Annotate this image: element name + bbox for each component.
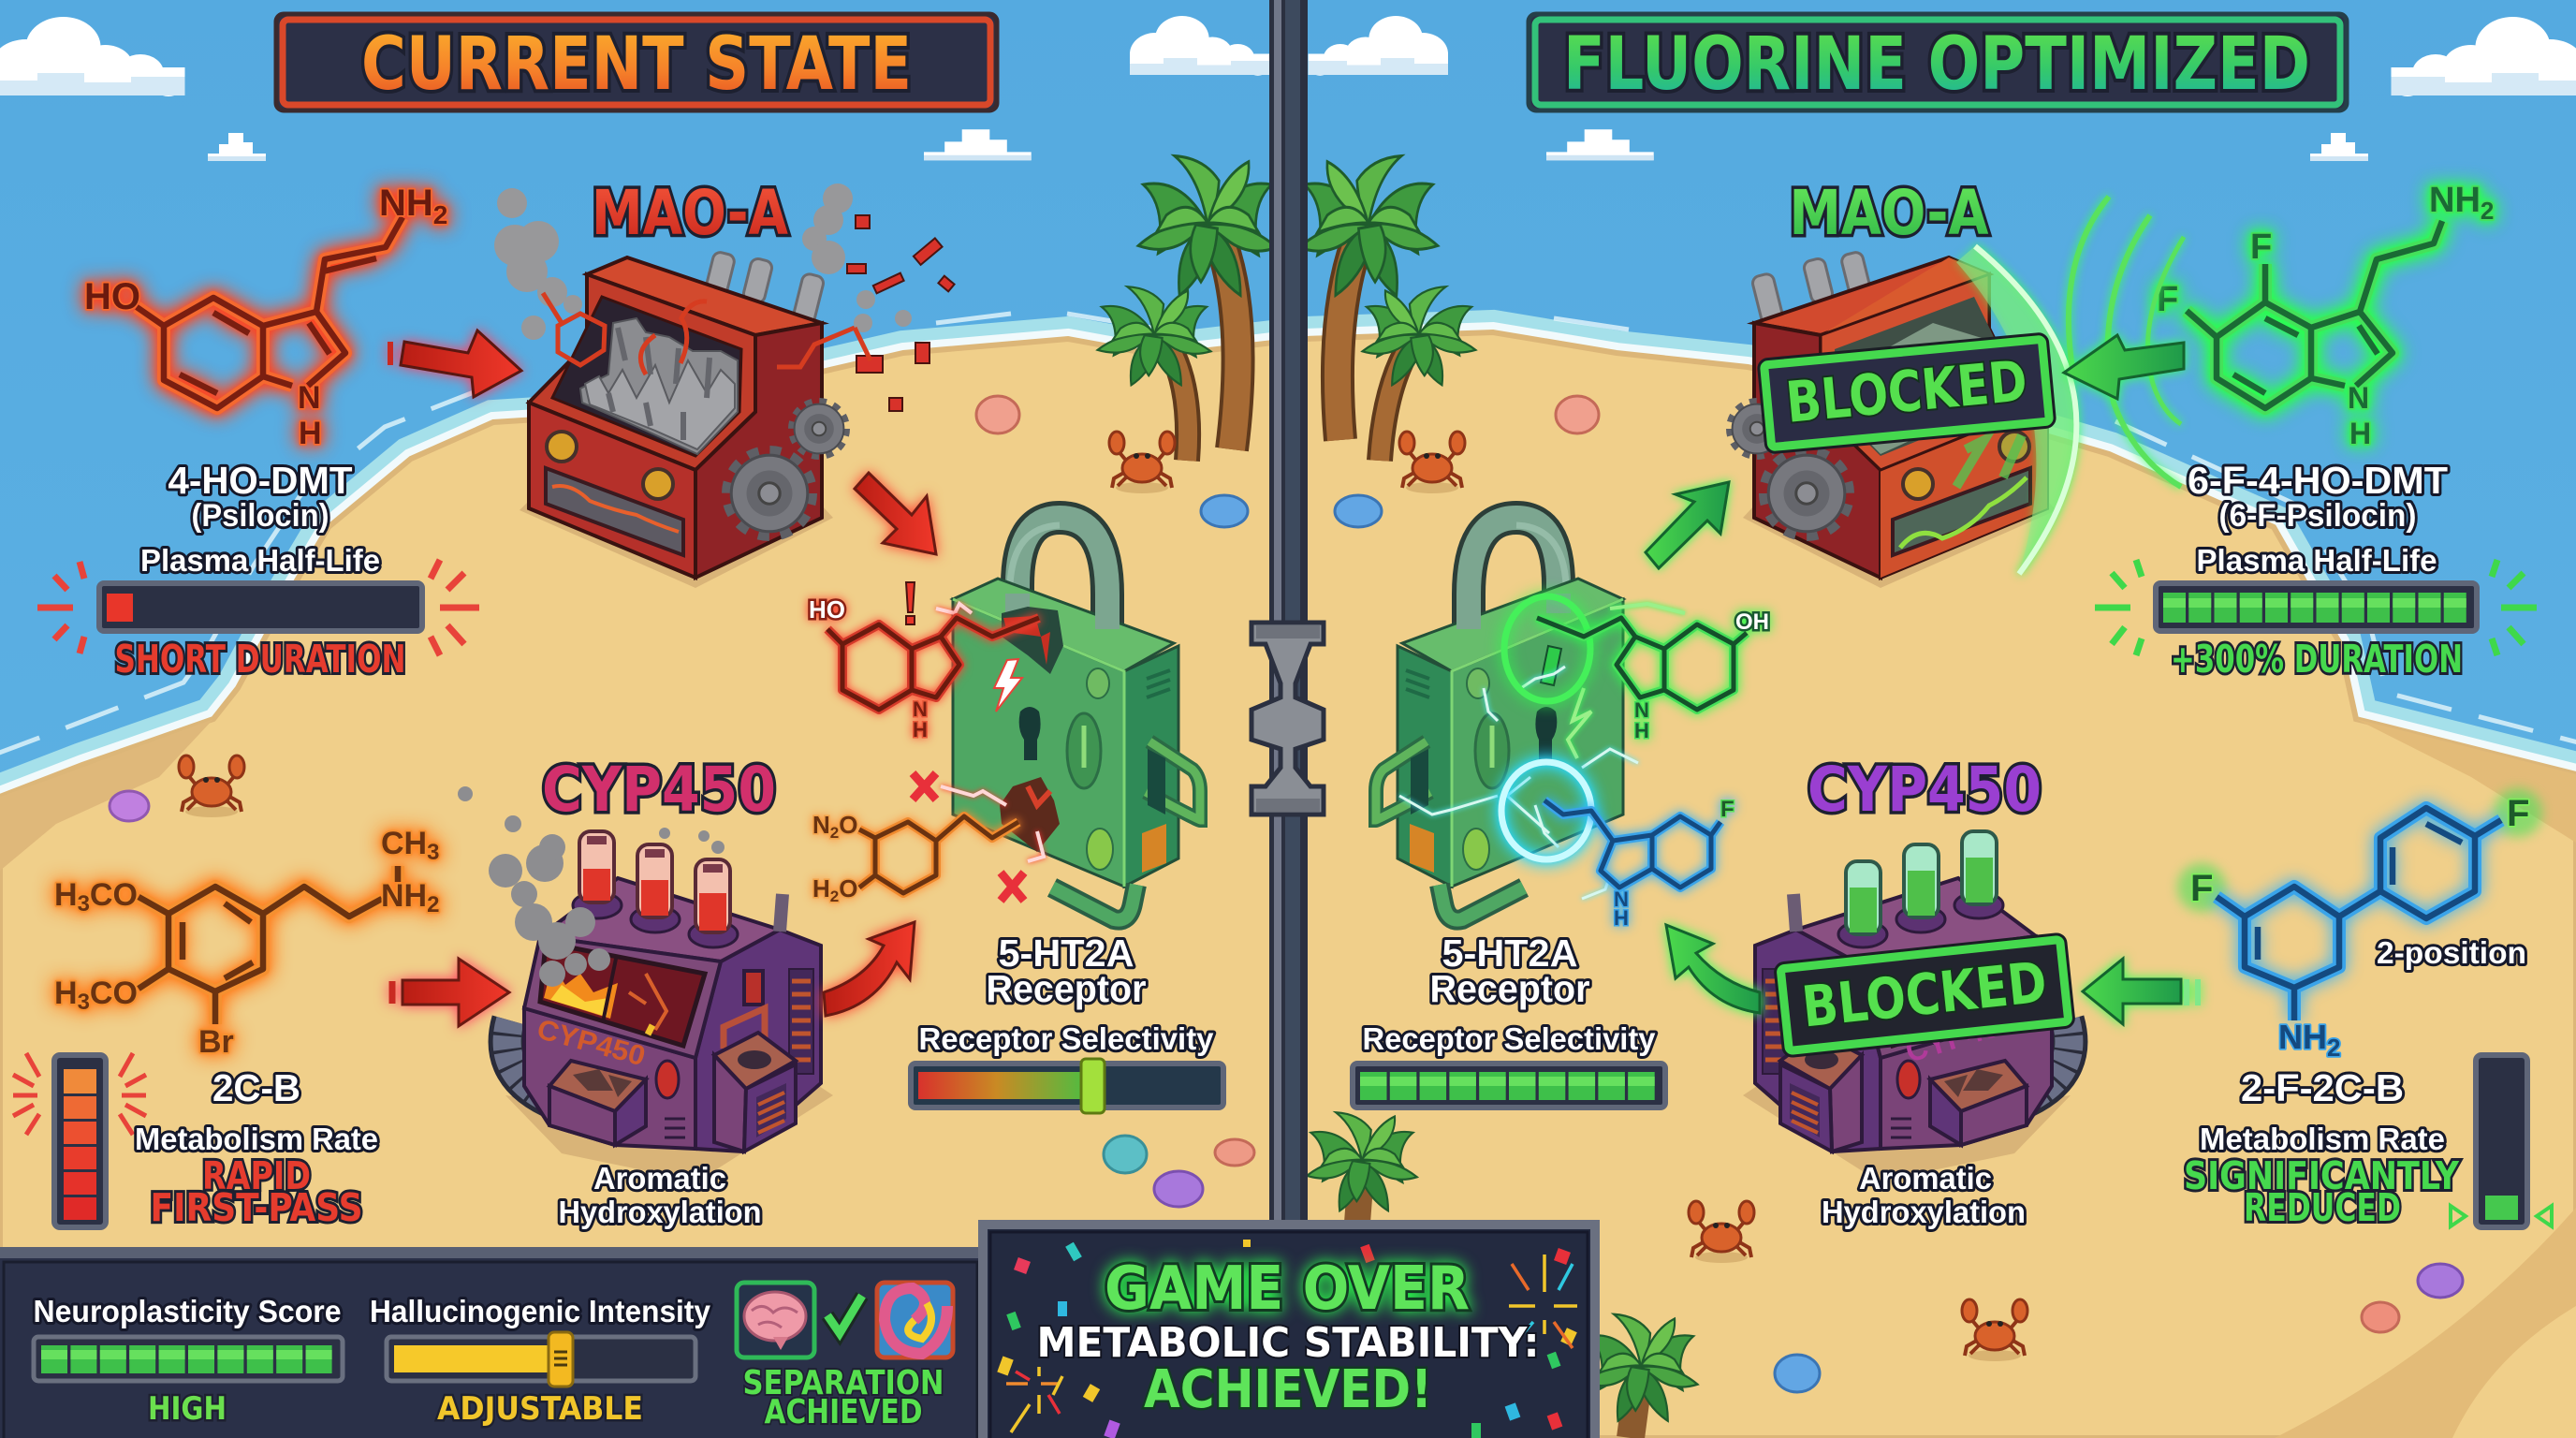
molecule: failed orange ligand: N xyxy=(812,811,830,839)
metric: neuroplasticity score: Neuroplasticity Score xyxy=(34,1294,341,1328)
molecule: 2C-B: 3 xyxy=(78,891,90,917)
arrow: molecule blocked from MAO-A xyxy=(2064,335,2184,399)
molecule: 2C-B: H xyxy=(54,877,78,913)
molecule: bound blue ligand: F xyxy=(1720,797,1734,822)
label: 5-HT2A receptor, left: 5-HT2A xyxy=(998,932,1134,975)
binding ring, green xyxy=(1504,596,1590,701)
icon: psychedelic spiral xyxy=(877,1283,953,1357)
molecule: 2C-B: CO xyxy=(90,877,138,913)
molecule: 2-F-2C-B: F xyxy=(2507,793,2529,834)
machine: CYP450 protected xyxy=(1743,831,2071,1181)
icon: brain xyxy=(737,1283,814,1357)
background: beach xyxy=(0,314,2576,1438)
molecule: 4-HO-DMT: NH xyxy=(379,183,433,224)
molecule: failed orange ligand: O xyxy=(839,811,857,839)
label: metabolism rate, left: RAPID xyxy=(202,1153,311,1198)
panel: game over xyxy=(983,1225,1595,1438)
label: 5-HT2A receptor, right: Receptor xyxy=(1430,967,1590,1010)
molecule: 4-HO-DMT: HO xyxy=(84,276,140,317)
label: 2-position: 2-position xyxy=(2377,935,2526,970)
molecule: failed orange ligand xyxy=(812,811,1018,905)
arrow: MAO-A to receptor xyxy=(855,473,936,554)
receptor lock, left xyxy=(936,518,1200,920)
arrow: CYP450 towards receptor xyxy=(1666,925,1760,1013)
molecule: failed orange ligand: O xyxy=(839,874,857,902)
molecule: 6-F-4-HO-DMT: NH xyxy=(2429,181,2481,220)
gauge: plasma half-life, long: +300% DURATION xyxy=(2171,637,2463,682)
molecule: 2C-B: NH xyxy=(381,878,427,914)
sign: blocked on MAO-A: BLOCKED xyxy=(1783,348,2030,436)
gauge: plasma half-life, short: Plasma Half-Life xyxy=(140,543,380,578)
molecule: 2-F-2C-B: 2 xyxy=(2327,1034,2340,1062)
arrow: CYP450 to receptor xyxy=(824,922,915,1016)
fireworks xyxy=(1006,1255,1577,1432)
label: metabolism rate, left: Metabolism Rate xyxy=(135,1122,378,1156)
label: 4-HO-DMT (Psilocin): (Psilocin) xyxy=(191,498,329,534)
arrow: receptor towards MAO-A xyxy=(1646,482,1729,568)
molecule: 2C-B: 3 xyxy=(427,840,439,865)
icon: red x marks xyxy=(913,773,1024,901)
molecule: 4-HO-DMT: H xyxy=(299,416,322,451)
arrow: 2C-B into CYP450 xyxy=(392,959,509,1026)
molecule: 6-F-4-HO-DMT xyxy=(2157,181,2494,450)
label: aromatic hydroxylation, left: Aromatic xyxy=(593,1161,726,1196)
crabs xyxy=(179,432,2027,1361)
gauge: plasma half-life, short: SHORT DURATION xyxy=(114,637,406,682)
metric: hallucinogenic intensity: ADJUSTABLE xyxy=(437,1390,643,1428)
label: 6-F-4-HO-DMT (6-F-Psilocin): (6-F-Psilocin) xyxy=(2218,498,2417,534)
machine: CYP450 protected: CYP450 xyxy=(1901,1003,2019,1070)
title banner: fluorine optimized: FLUORINE OPTIMIZED xyxy=(1563,22,2310,107)
label: 5-HT2A receptor, right: 5-HT2A xyxy=(1442,932,1578,975)
label: metabolism rate, right xyxy=(2184,1122,2460,1230)
molecule: bound blue ligand: H xyxy=(1614,906,1629,930)
heading: MAO-A damaged: MAO-A xyxy=(592,177,788,249)
molecule: 2-F-2C-B: F xyxy=(2190,868,2213,909)
shield arcs xyxy=(1956,197,2184,574)
gauge: metabolism rate, right xyxy=(2451,1055,2552,1227)
molecule: 4-HO-DMT: N xyxy=(298,380,321,416)
molecule: 4-HO-DMT xyxy=(84,183,447,451)
label: metabolism rate, right: SIGNIFICANTLY xyxy=(2184,1153,2460,1198)
confetti xyxy=(997,1240,1577,1438)
metric: neuroplasticity score xyxy=(34,1294,343,1428)
binding ring, cyan xyxy=(1501,762,1591,859)
sign: blocked on CYP450: BLOCKED xyxy=(1799,949,2050,1041)
label: separation achieved: SEPARATION xyxy=(743,1364,944,1402)
gauge: receptor selectivity, right: Receptor Selectivity xyxy=(1363,1021,1656,1056)
label: metabolism rate, left: FIRST-PASS xyxy=(150,1185,363,1230)
molecule: 2C-B: H xyxy=(54,976,78,1011)
molecule: bound green ligand: H xyxy=(1634,719,1649,742)
molecule: bound blue ligand xyxy=(1544,797,1734,930)
machine: MAO-A shielded xyxy=(1731,251,2056,588)
gauge: receptor selectivity, left xyxy=(911,1021,1223,1113)
seashells xyxy=(110,396,2463,1392)
molecule: 2C-B: CH xyxy=(381,826,427,861)
text: metabolic stability: METABOLIC STABILITY: xyxy=(1037,1319,1539,1367)
heading: game over: GAME OVER xyxy=(1105,1255,1470,1324)
gauge: plasma half-life, long: Plasma Half-Life xyxy=(2196,543,2437,578)
machine: MAO-A shredder xyxy=(520,251,871,588)
label: metabolism rate, right: Metabolism Rate xyxy=(2200,1122,2445,1156)
label: separation achieved xyxy=(743,1364,944,1431)
gauge: plasma half-life, short xyxy=(37,543,479,682)
label: 6-F-4-HO-DMT (6-F-Psilocin): 6-F-4-HO-DMT xyxy=(2188,459,2448,502)
label: aromatic hydroxylation, right: Hydroxylation xyxy=(1822,1195,2026,1229)
molecule: 4-HO-DMT: 2 xyxy=(433,200,447,229)
molecule: 6-F-4-HO-DMT: F xyxy=(2157,280,2178,319)
label: separation achieved: ACHIEVED xyxy=(764,1393,923,1431)
molecule: 2C-B: CO xyxy=(90,976,138,1011)
molecule: failed orange ligand: H xyxy=(812,874,830,902)
molecule: 6-F-4-HO-DMT: 2 xyxy=(2481,197,2494,225)
molecule: bound green ligand: N xyxy=(1634,698,1649,722)
molecule: 6-F-4-HO-DMT: F xyxy=(2250,227,2272,267)
label: 5-HT2A receptor, left xyxy=(987,932,1147,1010)
machine: CYP450 overheating: CYP450 xyxy=(534,1014,649,1072)
label: 2C-B: 2C-B xyxy=(212,1066,300,1109)
label: 5-HT2A receptor, left: Receptor xyxy=(987,967,1147,1010)
label: 4-HO-DMT (Psilocin) xyxy=(168,459,352,534)
centre divider column xyxy=(1251,0,1324,1226)
label: metabolism rate, left xyxy=(135,1122,378,1230)
molecule: failed red ligand: HO xyxy=(809,595,845,624)
machine: CYP450 overheating xyxy=(458,786,833,1181)
molecule: bound blue ligand: N xyxy=(1614,888,1629,911)
gauge: metabolism rate, left xyxy=(13,1053,146,1227)
icon: checkmark xyxy=(827,1296,862,1333)
label: aromatic hydroxylation, right: Aromatic xyxy=(1859,1161,1992,1196)
molecule: 2C-B: 3 xyxy=(78,990,90,1015)
heading: MAO-A protected: MAO-A xyxy=(1790,177,1988,249)
molecule: failed red ligand: N xyxy=(913,697,928,721)
molecule: failed orange ligand: 2 xyxy=(830,888,839,905)
label: 6-F-4-HO-DMT (6-F-Psilocin) xyxy=(2188,459,2448,534)
panel: outcome metrics xyxy=(0,1253,987,1438)
receptor lock, right xyxy=(1376,518,1685,920)
molecule: failed red ligand: H xyxy=(913,718,928,741)
clouds xyxy=(0,16,2576,161)
gauge: plasma half-life, long xyxy=(2095,543,2537,682)
label: aromatic hydroxylation, right xyxy=(1822,1161,2026,1229)
gauge: receptor selectivity, right xyxy=(1353,1021,1665,1108)
smoke and debris around MAO-A xyxy=(494,183,955,411)
heading: CYP450 protected: CYP450 xyxy=(1808,754,2042,826)
palm trees, centre right xyxy=(1299,156,1475,461)
molecule: bound green ligand xyxy=(1537,609,1769,742)
molecule: 2-F-2C-B: NH xyxy=(2278,1018,2327,1056)
icon: alert marker xyxy=(906,582,915,624)
text: achieved: ACHIEVED! xyxy=(1144,1359,1432,1420)
metric: neuroplasticity score: HIGH xyxy=(148,1390,227,1428)
molecule: 2C-B: Br xyxy=(198,1024,234,1060)
molecule: bound green ligand: OH xyxy=(1735,609,1769,635)
molecule: 2C-B xyxy=(54,826,439,1060)
label: aromatic hydroxylation, left xyxy=(558,1161,762,1229)
palm tree, bottom right xyxy=(1585,1314,1697,1438)
label: 5-HT2A receptor, right xyxy=(1430,932,1590,1010)
molecule: failed orange ligand: 2 xyxy=(830,824,839,842)
metric: hallucinogenic intensity: Hallucinogenic Intensity xyxy=(370,1294,711,1328)
arrow: 2-F-2C-B blocked from CYP450 xyxy=(2083,959,2198,1024)
molecule: 6-F-4-HO-DMT: H xyxy=(2349,417,2371,450)
title banner: current state: CURRENT STATE xyxy=(361,22,912,107)
heading: CYP450 damaged: CYP450 xyxy=(542,754,776,826)
arrow: molecule into MAO-A xyxy=(390,330,521,397)
metric: hallucinogenic intensity xyxy=(370,1294,711,1428)
palm trees, centre left xyxy=(1098,156,1277,461)
molecule: failed red ligand xyxy=(809,595,1039,741)
palm tree, bottom centre xyxy=(1307,1112,1417,1223)
gauge: receptor selectivity, left: Receptor Selectivity xyxy=(919,1021,1214,1056)
molecule: 6-F-4-HO-DMT: N xyxy=(2348,381,2369,415)
label: 2-F-2C-B: 2-F-2C-B xyxy=(2241,1066,2404,1109)
molecule: 2C-B: 2 xyxy=(427,892,439,917)
label: metabolism rate, right: REDUCED xyxy=(2244,1185,2401,1230)
label: 4-HO-DMT (Psilocin): 4-HO-DMT xyxy=(168,459,352,502)
label: aromatic hydroxylation, left: Hydroxylation xyxy=(558,1195,762,1229)
molecule: 2-F-2C-B xyxy=(2177,788,2542,1062)
